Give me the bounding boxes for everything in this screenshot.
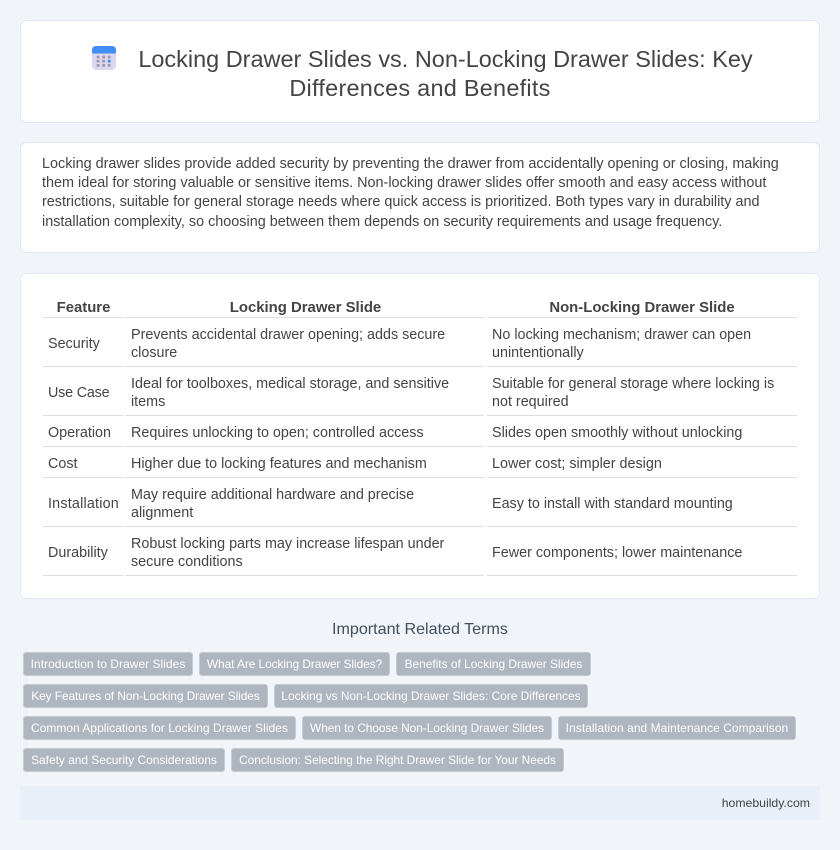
header card [20,20,820,123]
footer bar [20,786,820,820]
row: security: closure [131,345,177,361]
row: security: Security [48,336,100,352]
row: use case: Ideal for toolboxes, medical storage, and sensitive [131,376,449,392]
row: operation: Operation [48,425,111,441]
intro text: Locking drawer slides provide added security by preventing the drawer from accidentally opening or closing, making [42,156,779,172]
row: durability: Robust locking parts may increase lifespan under [131,536,444,552]
row: use case: Use Case [48,385,109,401]
table header row [43,300,797,318]
tag row 1 [23,652,591,676]
row: operation: Requires unlocking to open; controlled access [131,425,424,441]
row: use case: not required [492,394,569,410]
row: installation: Installation [48,496,119,512]
row: security [43,327,797,367]
title: Differences and Benefits [289,74,551,100]
row: security: Prevents accidental drawer opening; adds secure [131,327,445,343]
tag row 1: Benefits of Locking Drawer Slides [405,657,582,671]
table header row: Non-Locking Drawer Slide [549,300,735,316]
tag row 2 [23,684,588,708]
intro text: installation complexity, so choosing between them depends on security requirements and usage frequency. [42,214,722,230]
tag row 2: Key Features of Non-Locking Drawer Slides [31,689,260,703]
row: durability [43,536,797,576]
footer text: site name: homebuildy.com [722,796,810,810]
intro text [42,156,779,230]
row: use case: items [131,394,165,410]
tag row 3 [23,716,796,740]
table header row: Feature [57,300,110,316]
table header row: Locking Drawer Slide [230,300,381,316]
row: durability: secure conditions [131,554,243,570]
row: security: No locking mechanism; drawer can open [492,327,751,343]
tag row 4: Safety and Security Considerations [31,753,217,767]
icon: calendar grid [92,46,116,70]
intro paragraph card [20,142,820,253]
tag row 4: Conclusion: Selecting the Right Drawer Slide for Your Needs [239,753,556,767]
row: use case: Suitable for general storage where locking is [492,376,774,392]
intro text: them ideal for storing valuable or sensitive items. Non-locking drawer slides offer smooth and easy access without [42,175,766,191]
tag row 2: Locking vs Non-Locking Drawer Slides: Core Differences [281,689,581,703]
tag row 3: Common Applications for Locking Drawer Slides [31,721,288,735]
row: durability: Fewer components; lower maintenance [492,545,742,561]
heading: important related terms: Important Related Terms [332,620,508,638]
tag row 1: What Are Locking Drawer Slides? [207,657,382,671]
row: operation [43,425,797,447]
row: cost [43,456,797,478]
row: installation: May require additional hardware and precise [131,487,414,503]
row: cost: Higher due to locking features and mechanism [131,456,427,472]
tag row 3: When to Choose Non-Locking Drawer Slides [310,721,544,735]
title [138,46,753,100]
intro text: restrictions, suitable for general storage needs where quick access is prioritized. Both types vary in durability and [42,194,760,210]
row: installation: Easy to install with standard mounting [492,496,733,512]
row: durability: Durability [48,545,108,561]
row: security: unintentionally [492,345,584,361]
row: use case [43,376,797,416]
comparison table card [20,273,820,599]
tag row 1: Introduction to Drawer Slides [31,657,185,671]
tag row 4 [23,748,564,772]
title: Locking Drawer Slides vs. Non-Locking Drawer Slides: Key [138,46,753,72]
row: cost: Cost [48,456,78,472]
row: installation [43,487,797,527]
row: installation: alignment [131,505,193,521]
tag row 3: Installation and Maintenance Comparison [566,721,788,735]
row: cost: Lower cost; simpler design [492,456,662,472]
row: operation: Slides open smoothly without unlocking [492,425,742,441]
related terms tags [23,652,796,772]
